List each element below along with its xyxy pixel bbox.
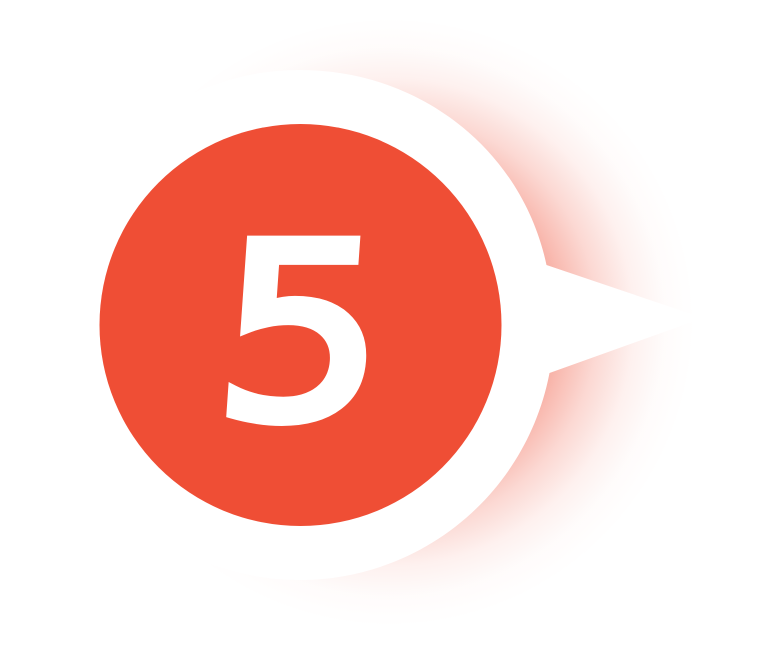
- soft red shadow: [85, 17, 695, 627]
- white callout pointer shape: [45, 70, 703, 580]
- number 5: 5: [206, 191, 396, 476]
- red number circle: [100, 124, 502, 526]
